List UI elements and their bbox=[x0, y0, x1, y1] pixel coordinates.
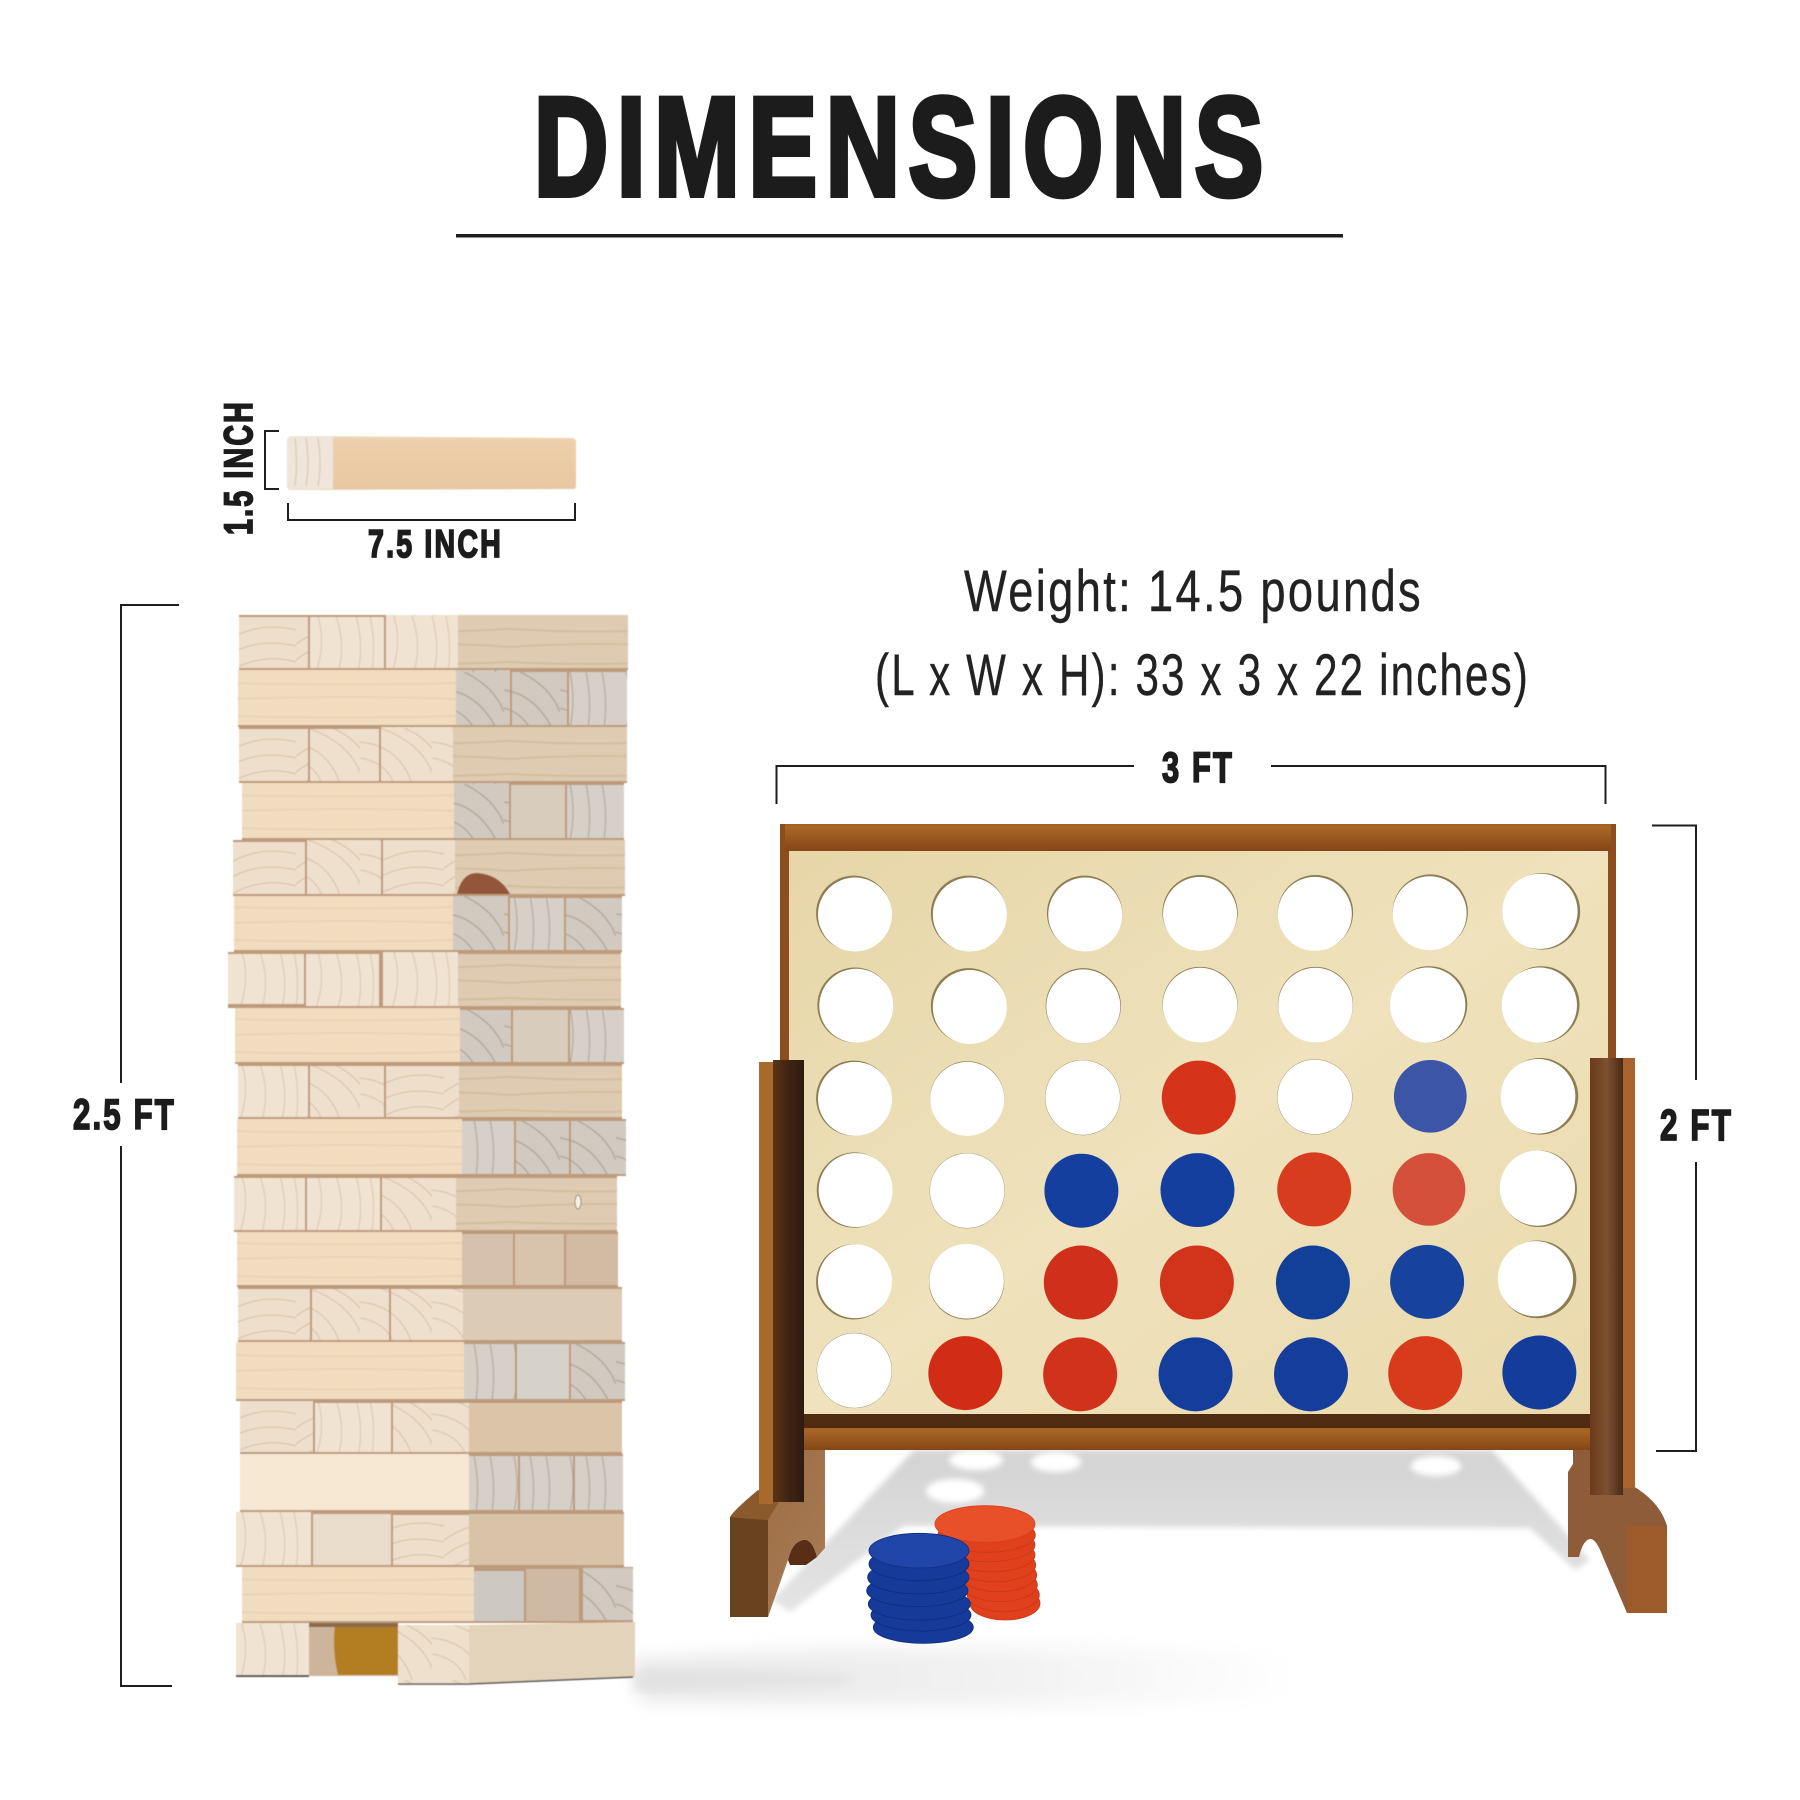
grid row 2 bbox=[817, 966, 1580, 1044]
width bracket right bbox=[1271, 766, 1606, 804]
tower bracket lower bbox=[121, 1146, 172, 1686]
label: 3 ft: 3 FT bbox=[1162, 744, 1234, 792]
label: 7.5 inch: 7.5 INCH bbox=[368, 523, 503, 566]
height bracket lower bbox=[1656, 1162, 1696, 1451]
grid row 1 bbox=[816, 873, 1580, 952]
grid row 6 bbox=[817, 1333, 1576, 1411]
tower of wooden blocks bbox=[228, 615, 635, 1685]
label: 2 ft: 2 FT bbox=[1660, 1101, 1733, 1150]
row 6 bbox=[234, 896, 622, 952]
top rail bbox=[785, 824, 1611, 851]
specification text bbox=[875, 559, 1530, 708]
grid row 5 bbox=[816, 1240, 1576, 1320]
row 10 bbox=[237, 1119, 626, 1176]
row 16 bbox=[240, 1454, 623, 1512]
row 5 bbox=[233, 840, 625, 896]
row 8 bbox=[235, 1008, 624, 1064]
weight: Weight: 14.5 pounds bbox=[964, 559, 1423, 624]
label: 2.5 ft: 2.5 FT bbox=[73, 1091, 176, 1139]
left post bbox=[759, 1060, 804, 1504]
chip stacks bbox=[867, 1506, 1040, 1643]
bracket: block length bbox=[288, 503, 575, 520]
bottom rail bbox=[804, 1414, 1591, 1450]
dimension: tower height bbox=[73, 605, 179, 1686]
grid row 4 bbox=[817, 1151, 1577, 1228]
row 12 bbox=[237, 1232, 618, 1287]
dimension: board width bbox=[776, 744, 1606, 804]
title underline bbox=[456, 234, 1343, 238]
row 14 bbox=[236, 1342, 625, 1401]
row 19: base bbox=[236, 1622, 635, 1685]
holes and chips bbox=[816, 873, 1580, 1411]
row 13 bbox=[238, 1287, 622, 1342]
row 3 bbox=[239, 727, 627, 783]
bracket: block height bbox=[265, 431, 279, 489]
frame uprights bbox=[780, 824, 1616, 1064]
row 4 bbox=[242, 783, 624, 840]
grid row 3 bbox=[816, 1058, 1578, 1136]
row 2 bbox=[238, 670, 627, 727]
right post bbox=[1590, 1058, 1635, 1495]
tower bracket upper bbox=[121, 605, 179, 1083]
board panel bbox=[789, 851, 1608, 1415]
row 18 bbox=[242, 1567, 633, 1623]
height bracket upper bbox=[1652, 826, 1696, 1080]
size: (L x W x H): 33 x 3 x 22 inches) bbox=[875, 643, 1530, 708]
width bracket left bbox=[776, 766, 1134, 804]
board cast shadow bbox=[772, 1450, 1590, 1612]
label: 1.5 inch: 1.5 INCH bbox=[217, 400, 261, 535]
connect-four board bbox=[730, 824, 1667, 1617]
title: DIMENSIONS bbox=[534, 68, 1272, 225]
floor shadow of tower bbox=[630, 1648, 1300, 1706]
single block bbox=[287, 436, 576, 490]
row 15 bbox=[240, 1401, 622, 1454]
row 7 bbox=[228, 952, 621, 1008]
dimension: board height bbox=[1652, 826, 1733, 1451]
row 9 bbox=[238, 1064, 622, 1119]
red chip stack bbox=[935, 1506, 1040, 1620]
blue chip stack bbox=[867, 1533, 973, 1643]
left foot bbox=[730, 1450, 825, 1617]
row 1 bbox=[239, 615, 628, 670]
panel: single block with dimensions bbox=[217, 400, 576, 566]
row 17 bbox=[236, 1512, 624, 1567]
row 11 bbox=[234, 1176, 617, 1232]
right foot bbox=[1568, 1450, 1667, 1613]
